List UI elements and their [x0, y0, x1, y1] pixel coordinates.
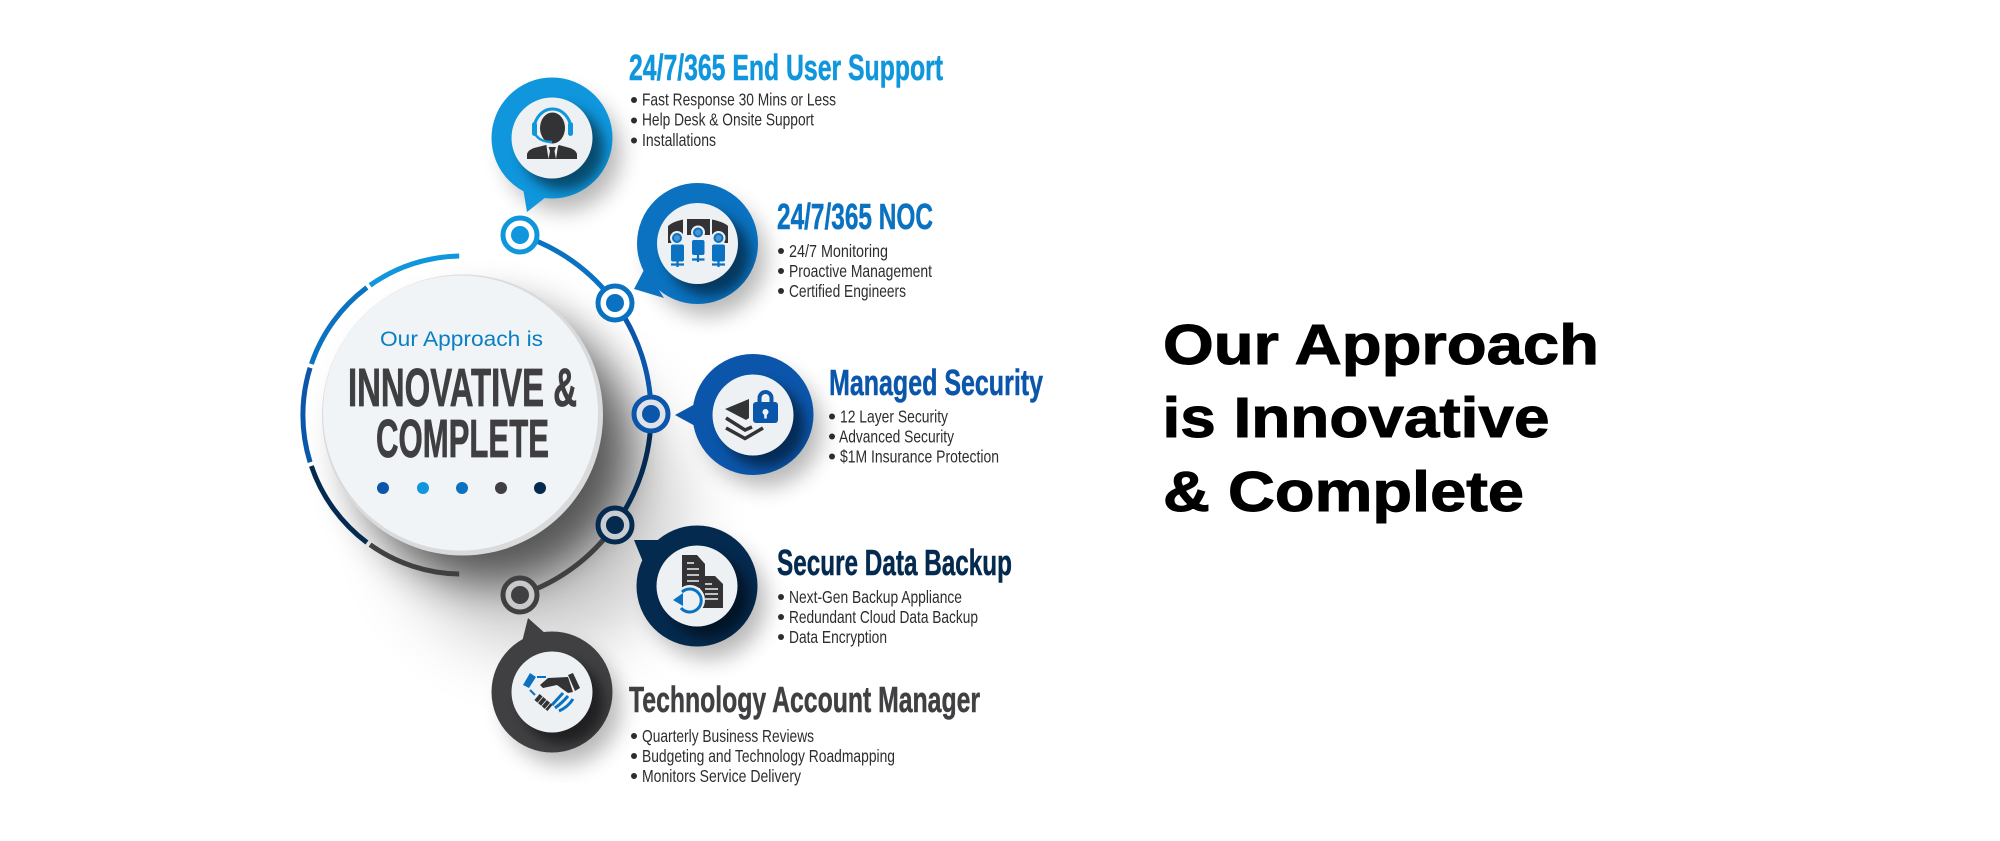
connector arc [520, 235, 651, 595]
bullet list: Installations [642, 130, 716, 150]
bubble 5: technology account manager [492, 618, 621, 765]
icon: support agent with headset [527, 109, 577, 159]
title: is Innovative [1162, 386, 1550, 450]
bullet list: Help Desk & Onsite Support [642, 110, 814, 130]
bullet list: Quarterly Business Reviews [642, 726, 814, 746]
bullet list: Fast Response 30 Mins or Less [642, 90, 836, 110]
bullet list: Monitors Service Delivery [642, 766, 801, 786]
outer segmented ring [303, 256, 459, 574]
infographic canvas [300, 53, 1596, 786]
title [1162, 313, 1599, 524]
title: & Complete [1163, 460, 1524, 524]
heading: Technology Account Manager [629, 679, 980, 720]
central disc colour dots [377, 482, 546, 494]
bullet list: Redundant Cloud Data Backup [789, 607, 978, 627]
bullet list: $1M Insurance Protection [840, 446, 999, 466]
central disc label small: Our Approach is [380, 328, 543, 351]
bullet list [778, 587, 978, 647]
heading: Managed Security [829, 362, 1043, 403]
central disc [322, 274, 603, 556]
icon: layers and padlock [725, 392, 778, 438]
text: technology account manager [629, 679, 980, 786]
bullet list [631, 726, 895, 786]
icon: handshake [523, 673, 580, 711]
bubble 1: end user support [492, 78, 621, 212]
bubble 3: managed security [675, 354, 822, 487]
bubble 4: secure data backup [634, 526, 766, 659]
central disc headline line 2: COMPLETE [376, 409, 549, 469]
bullet list: Proactive Management [789, 261, 932, 281]
bullet list: Certified Engineers [789, 281, 906, 301]
text: managed security [829, 362, 1043, 466]
text: NOC [777, 196, 933, 301]
bullet list [631, 90, 836, 150]
heading: 24/7/365 NOC [777, 196, 933, 237]
bullet list: Next-Gen Backup Appliance [789, 587, 962, 607]
central disc shadow [352, 307, 680, 650]
icon: network operations centre [668, 219, 728, 267]
heading: Secure Data Backup [777, 542, 1012, 583]
bullet list: 12 Layer Security [840, 406, 948, 426]
bullet list [829, 406, 999, 466]
bullet list: Budgeting and Technology Roadmapping [642, 746, 895, 766]
heading: 24/7/365 End User Support [629, 47, 943, 88]
central disc headline line 1: INNOVATIVE & [348, 358, 577, 418]
bubble 2: NOC [634, 183, 766, 316]
bullet list: Advanced Security [839, 426, 954, 446]
timeline nodes [503, 218, 668, 612]
text: end user support [629, 47, 943, 150]
bullet list [778, 241, 932, 301]
bullet list: Data Encryption [789, 627, 887, 647]
icon: documents with restore arrow [673, 555, 723, 615]
bullet list: 24/7 Monitoring [789, 241, 888, 261]
text: secure data backup [777, 542, 1012, 647]
title: Our Approach [1163, 313, 1599, 377]
